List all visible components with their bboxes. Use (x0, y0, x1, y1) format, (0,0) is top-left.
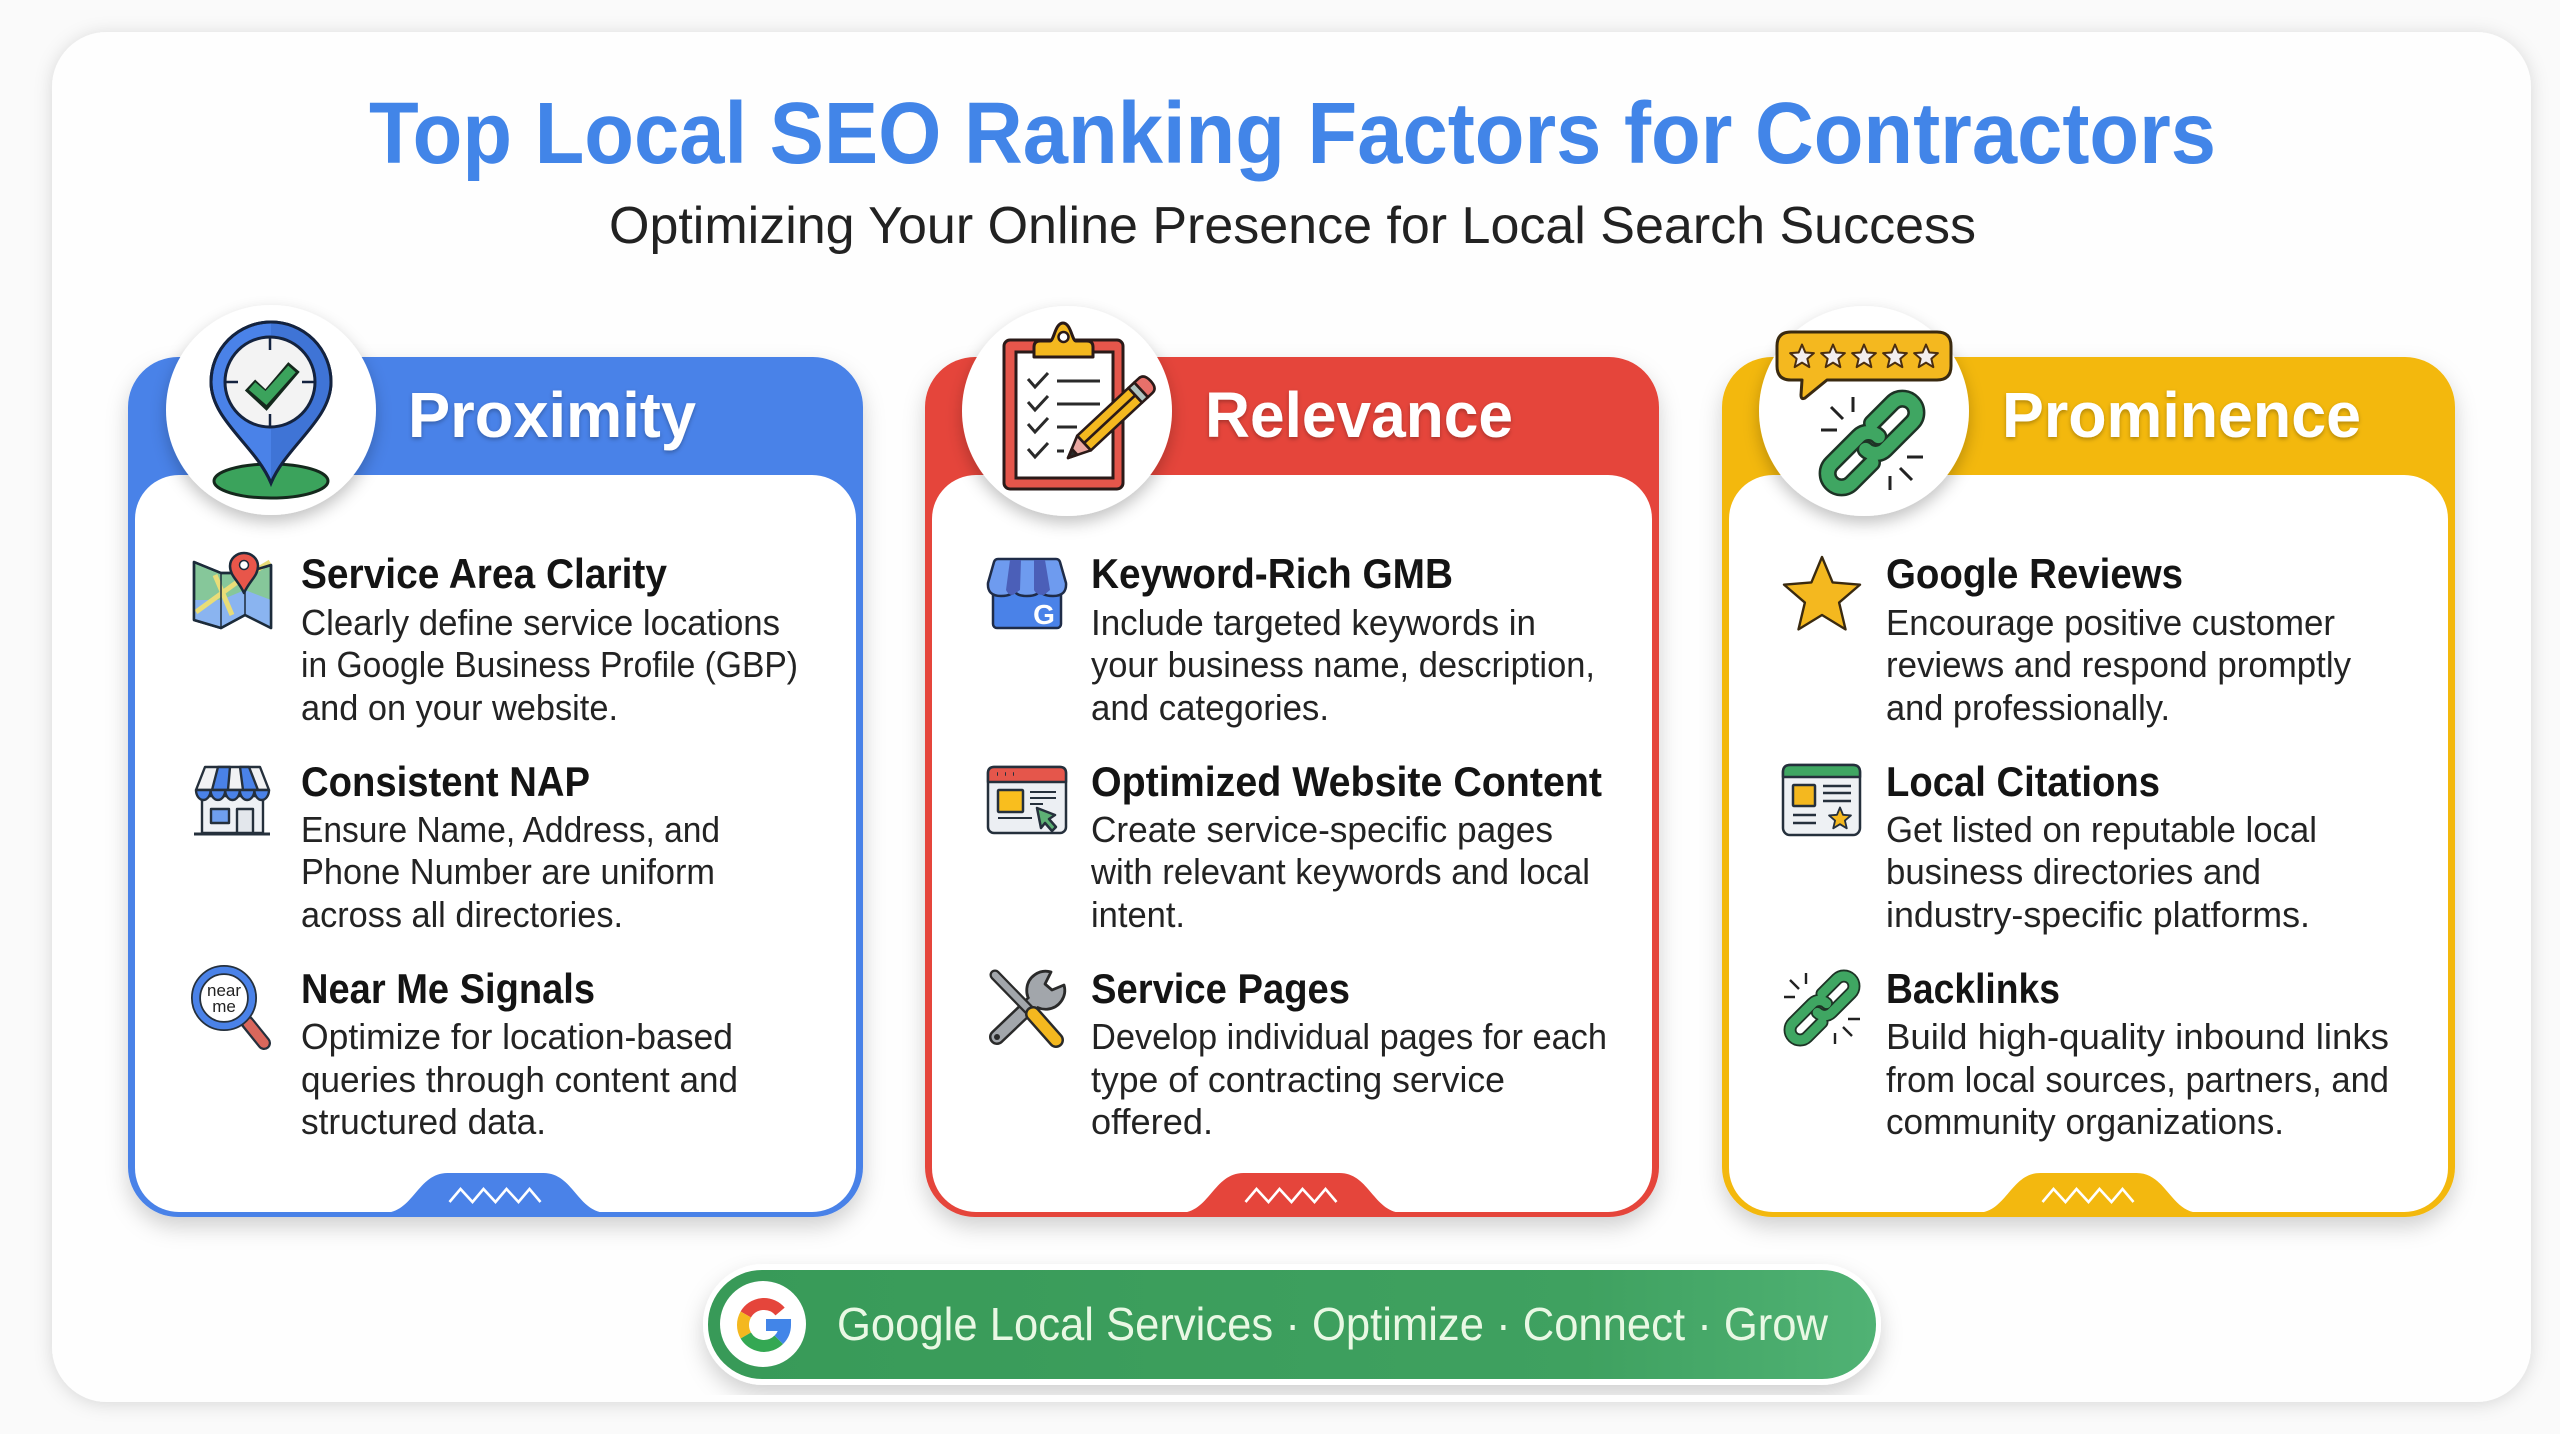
card frame (128, 357, 863, 1217)
footer pill (703, 1264, 1881, 1385)
item heading: Consistent NAP (301, 758, 590, 805)
panel: relevance (925, 306, 1659, 1217)
item body: Get listed on reputable local (1886, 809, 2317, 850)
subtitle: Optimizing Your Online Presence for Local Search Success (609, 197, 1976, 255)
item heading: Backlinks (1886, 965, 2060, 1012)
item heading: Near Me Signals (301, 965, 595, 1012)
icon: magnifier near me: near (207, 981, 241, 1000)
icon: google g (720, 1281, 806, 1367)
pill text: Google Local Services · Optimize · Connect · Grow (837, 1298, 1829, 1350)
item heading: Service Area Clarity (301, 550, 668, 597)
item body: Encourage positive customer (1886, 602, 2335, 643)
bottom tab (1976, 1173, 2200, 1213)
item: service pages (994, 965, 1607, 1142)
item: consistent nap (194, 758, 720, 935)
item body (1886, 809, 2317, 935)
item body (301, 602, 798, 728)
item body (1886, 1016, 2389, 1142)
heading: Prominence (2002, 379, 2361, 451)
icon: chain link (1784, 972, 1860, 1044)
item body: community organizations. (1886, 1101, 2284, 1142)
item body: Phone Number are uniform (301, 851, 715, 892)
icon: map (194, 553, 271, 628)
item: near me signals (196, 965, 738, 1142)
icon: storefront (194, 767, 270, 834)
item body (1091, 1016, 1607, 1142)
item heading: Keyword-Rich GMB (1091, 550, 1453, 597)
item heading: Local Citations (1886, 758, 2160, 805)
icon: directory listing (1783, 765, 1860, 835)
item body: business directories and (1886, 851, 2261, 892)
item heading: Google Reviews (1886, 550, 2183, 597)
heading: Relevance (1205, 379, 1513, 451)
icon badge: location pin with check (166, 305, 376, 515)
item body: your business name, description, (1091, 644, 1595, 685)
item body (1886, 602, 2351, 728)
item body: and on your website. (301, 687, 618, 728)
icon: gold star (1784, 557, 1860, 629)
panel: proximity (128, 305, 863, 1217)
card frame (1722, 357, 2455, 1217)
item body (1091, 602, 1595, 728)
icon: wrench and screwdriver (994, 971, 1065, 1040)
item: keyword-rich gmb (988, 550, 1595, 728)
item body: Create service-specific pages (1091, 809, 1553, 850)
item body: Clearly define service locations (301, 602, 780, 643)
item: google reviews (1784, 550, 2351, 728)
icon: business profile store (988, 559, 1066, 630)
item body: intent. (1091, 894, 1185, 935)
item: backlinks (1784, 965, 2389, 1142)
item body: and professionally. (1886, 687, 2170, 728)
item body: with relevant keywords and local (1090, 851, 1590, 892)
item heading: Optimized Website Content (1091, 758, 1602, 805)
item: local citations (1783, 758, 2317, 935)
heading: Proximity (408, 379, 696, 451)
item body: Optimize for location-based (301, 1016, 733, 1057)
item body: structured data. (301, 1101, 546, 1142)
icon: magnifier near me (196, 970, 264, 1043)
item body: Build high-quality inbound links (1886, 1016, 2389, 1057)
panel: prominence (1722, 306, 2455, 1217)
item body: industry-specific platforms. (1886, 894, 2310, 935)
item body: in Google Business Profile (GBP) (301, 644, 798, 685)
item: service area clarity (194, 550, 798, 728)
icon badge: review stars and link (1759, 306, 1969, 516)
bottom tab (1180, 1173, 1404, 1213)
icon: magnifier near me: me (212, 997, 236, 1016)
item body (1090, 809, 1590, 935)
icon: business profile store: G (1033, 599, 1055, 630)
title: Top Local SEO Ranking Factors for Contractors (369, 85, 2216, 182)
icon: browser window with cursor (988, 767, 1066, 833)
item body: and categories. (1091, 687, 1329, 728)
icon badge: clipboard and pencil (962, 306, 1172, 516)
item body: Ensure Name, Address, and (301, 809, 720, 850)
card frame (925, 357, 1659, 1217)
item body: across all directories. (301, 894, 623, 935)
item heading: Service Pages (1091, 965, 1350, 1012)
item body (301, 1016, 738, 1142)
item body: Include targeted keywords in (1091, 602, 1536, 643)
item body (301, 809, 720, 935)
item body: offered. (1091, 1101, 1213, 1142)
item body: reviews and respond promptly (1886, 644, 2351, 685)
item body: Develop individual pages for each (1091, 1016, 1607, 1057)
item body: queries through content and (301, 1059, 738, 1100)
item body: from local sources, partners, and (1886, 1059, 2389, 1100)
item body: type of contracting service (1091, 1059, 1505, 1100)
bottom tab (384, 1173, 608, 1213)
item: optimized website content (988, 758, 1602, 935)
